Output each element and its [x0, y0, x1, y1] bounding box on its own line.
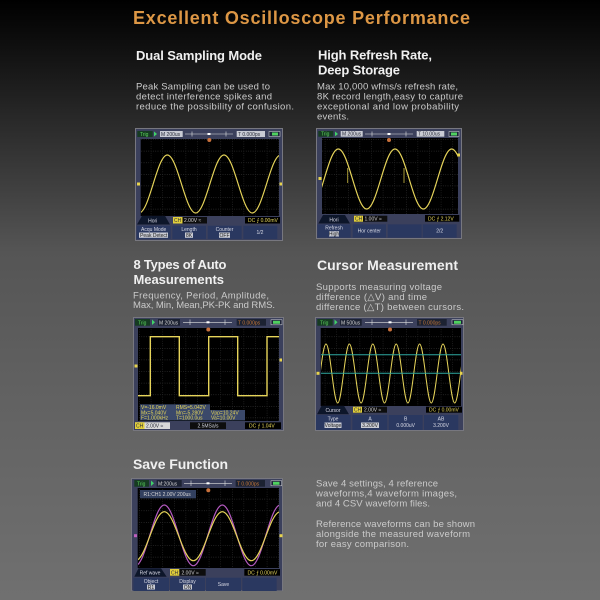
panel: oscilloscope screen reference wave: M:200us — [158, 481, 178, 487]
text block: cursor description: difference (△T) between cursors. — [316, 302, 464, 313]
heading: 8 types of auto measurements — [134, 257, 227, 287]
panel: oscilloscope screen reference wave: Display — [179, 579, 196, 585]
panel: oscilloscope screen peak detect: OFF — [220, 233, 230, 239]
text block: reference waveforms — [316, 519, 475, 550]
panel: oscilloscope screen cursor: Trig — [320, 320, 329, 326]
heading: dual sampling mode: Dual Sampling Mode — [136, 48, 262, 63]
panel: oscilloscope screen refresh: 1.00V ≈ — [364, 216, 382, 222]
text block: save capacity: and 4 CSV waveform files. — [316, 499, 430, 510]
panel: oscilloscope screen peak detect — [135, 128, 283, 241]
panel: oscilloscope screen refresh: Hori — [329, 218, 339, 224]
panel: oscilloscope screen reference wave: DC ⨍ 0.00mV — [248, 570, 278, 576]
panel: oscilloscope screen reference wave — [131, 478, 283, 591]
panel: oscilloscope screen refresh: 2/2 — [436, 229, 443, 235]
panel: oscilloscope screen peak detect: Hori — [148, 218, 157, 224]
text block: refresh rate description: Max 10,000 wfms/s refresh rate, — [317, 81, 458, 92]
heading: cursor measurement: Cursor Measurement — [317, 257, 458, 273]
measurement readouts: Mn=-5.280V — [176, 410, 204, 416]
panel: oscilloscope screen peak detect: Counter — [216, 227, 234, 233]
panel: oscilloscope screen refresh: Hor center — [358, 229, 381, 235]
panel: oscilloscope screen auto measurements: T 0.000ps — [238, 320, 261, 326]
text block: refresh rate description: exceptional and low probability — [317, 101, 459, 112]
panel: oscilloscope screen peak detect: T 0.000ps — [238, 132, 261, 138]
panel: oscilloscope screen peak detect: DC ⨍ 0.00mV — [248, 218, 279, 224]
panel: oscilloscope screen peak detect: Trig — [140, 132, 149, 138]
panel: oscilloscope screen reference wave: R1 — [148, 585, 154, 591]
panel: oscilloscope screen cursor: B — [404, 416, 408, 422]
heading: 8 types of auto measurements: Measurements — [134, 272, 224, 287]
panel: oscilloscope screen peak detect: 1/2 — [257, 230, 264, 236]
panel: oscilloscope screen cursor: 2.00V ≈ — [364, 408, 381, 414]
panel: oscilloscope screen reference wave: 2.00V ≈ — [182, 570, 199, 576]
text block: dual sampling description: reduce the possibility of confusion. — [136, 101, 294, 112]
panel: oscilloscope screen auto measurements: 2.00V ≈ — [146, 424, 163, 430]
measurement readouts — [140, 404, 245, 422]
text block: dual sampling description — [136, 81, 294, 112]
measurement readouts: T=1000.0us — [176, 416, 203, 422]
panel: oscilloscope screen peak detect: 8K — [186, 233, 193, 239]
text block: cursor description — [316, 282, 464, 313]
panel: oscilloscope screen reference wave: Trig — [137, 481, 146, 487]
text block: cursor description: difference (△V) and time — [316, 292, 427, 303]
heading: 8 types of auto measurements: 8 Types of Auto — [134, 257, 227, 272]
reference label — [140, 490, 196, 498]
oscilloscope display — [322, 138, 458, 214]
text block: save capacity: Save 4 settings, 4 reference — [316, 479, 438, 490]
panel: oscilloscope screen reference wave: Ref wave — [140, 570, 161, 576]
text block: refresh rate description — [317, 81, 463, 122]
panel: oscilloscope screen peak detect: Acqu Mode — [141, 227, 167, 233]
panel: oscilloscope screen auto measurements: Trig — [138, 320, 147, 326]
panel: oscilloscope screen cursor: 3.200V — [433, 423, 450, 429]
text block: save capacity — [315, 479, 457, 510]
panel: oscilloscope screen reference wave: ON — [184, 585, 192, 591]
text block: save capacity: waveforms,4 waveform images, — [315, 489, 457, 500]
text block: cursor description: Supports measuring voltage — [316, 282, 442, 293]
reference label: R1:CH1 2.00V 200us — [144, 492, 191, 498]
text block: refresh rate description: 8K record length,easy to capture — [317, 91, 463, 102]
text block: reference waveforms: alongside the measured waveform — [316, 529, 470, 540]
heading: high refresh rate — [318, 48, 432, 78]
oscilloscope display — [135, 488, 280, 568]
panel: oscilloscope screen refresh — [316, 128, 462, 239]
panel: oscilloscope screen cursor: A — [368, 416, 372, 422]
panel: oscilloscope screen refresh: T 10.00us — [418, 132, 441, 138]
measurement readouts: Va=10.00V — [211, 416, 236, 422]
panel: oscilloscope screen peak detect: Peak Detect — [140, 233, 168, 239]
panel: oscilloscope screen cursor: Voltage — [325, 423, 342, 429]
oscilloscope display — [139, 139, 281, 216]
text block: measurement types — [133, 290, 275, 311]
measurement readouts: Vpp=10.24V — [211, 410, 239, 416]
text block: dual sampling description: Peak Sampling can be used to — [136, 81, 270, 92]
panel: oscilloscope screen cursor: Type — [328, 416, 339, 422]
panel: oscilloscope screen reference wave: T 0.000ps — [237, 481, 260, 487]
panel: oscilloscope screen peak detect: 2.00V ≈ — [184, 218, 201, 224]
panel: oscilloscope screen auto measurements: M 200us — [159, 320, 179, 326]
panel: oscilloscope screen cursor: AB — [438, 416, 445, 422]
measurement readouts: RMS=5.042V — [176, 405, 207, 411]
oscilloscope display — [314, 328, 466, 406]
oscilloscope display — [138, 328, 279, 421]
panel: oscilloscope screen refresh: M 200us — [342, 132, 362, 138]
panel: oscilloscope screen cursor: M 500us — [341, 320, 361, 326]
text block: reference waveforms: for easy comparison. — [316, 539, 409, 550]
text block: reference waveforms: Reference waveforms can be shown — [316, 519, 475, 530]
panel: oscilloscope screen peak detect: M 200us — [161, 132, 181, 138]
panel: oscilloscope screen refresh: DC ⨍ 2.12V — [428, 216, 454, 222]
text block: refresh rate description: events. — [317, 111, 349, 122]
text block: measurement types: Max, Min, Mean,PK-PK and RMS. — [133, 300, 275, 311]
panel: oscilloscope screen peak detect: CH — [174, 218, 182, 224]
panel: oscilloscope screen cursor: 0.000uV — [396, 423, 416, 429]
panel: oscilloscope screen refresh: Refresh — [325, 226, 343, 232]
panel: oscilloscope screen reference wave: CH1 — [171, 570, 181, 576]
panel: oscilloscope screen auto measurements — [133, 317, 284, 431]
measurement readouts: V=-16.0mV — [141, 405, 167, 411]
measurement readouts: F=1.000kHz — [141, 416, 169, 422]
panel: oscilloscope screen cursor — [314, 317, 466, 431]
panel: oscilloscope screen refresh: Trig — [321, 132, 330, 138]
heading: save function: Save Function — [133, 456, 228, 472]
heading: high refresh rate: Deep Storage — [318, 62, 400, 78]
measurement readouts: Mx=5.040V — [141, 410, 167, 416]
text block: dual sampling description: detect interference spikes and — [136, 91, 272, 102]
panel: oscilloscope screen cursor: T 0.000ps — [418, 320, 441, 326]
panel: oscilloscope screen reference wave: Save — [218, 582, 229, 588]
panel: oscilloscope screen cursor: Cursor — [325, 408, 341, 414]
panel: oscilloscope screen auto measurements: DC ⨍ 1.04V — [249, 424, 275, 430]
panel: oscilloscope screen cursor: 3.200V — [362, 423, 379, 429]
panel: oscilloscope screen refresh: CH — [355, 216, 363, 222]
panel: oscilloscope screen auto measurements: 2.5MSa/s — [197, 424, 219, 430]
panel: oscilloscope screen peak detect: Length — [181, 227, 197, 233]
panel: oscilloscope screen cursor: DC ⨍ 0.00mV — [429, 408, 460, 414]
title: Excellent Oscilloscope Performance — [133, 8, 470, 28]
heading: high refresh rate: High Refresh Rate, — [318, 48, 432, 62]
panel: oscilloscope screen reference wave: Object — [144, 579, 159, 585]
panel: oscilloscope screen auto measurements: CH — [136, 424, 144, 430]
text block: measurement types: Frequency, Period, Amplitude, — [133, 290, 269, 301]
panel: oscilloscope screen cursor: CH — [354, 408, 362, 414]
panel: oscilloscope screen refresh: High — [329, 232, 339, 238]
